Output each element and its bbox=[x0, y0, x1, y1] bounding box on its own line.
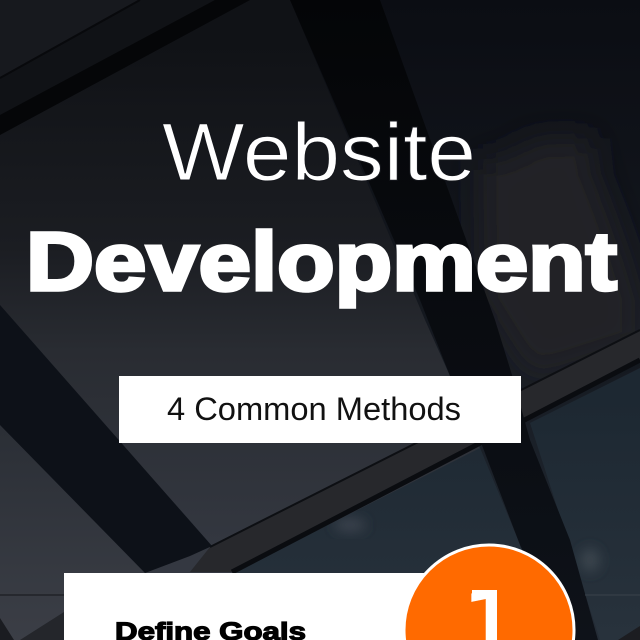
title: Development: Development bbox=[26, 215, 617, 308]
subtitle box bbox=[119, 376, 521, 443]
panel: step 1 card bbox=[64, 573, 464, 640]
title: Website: Website bbox=[162, 107, 476, 198]
subtitle box: 4 Common Methods bbox=[167, 391, 461, 427]
step number badge bbox=[404, 545, 574, 640]
